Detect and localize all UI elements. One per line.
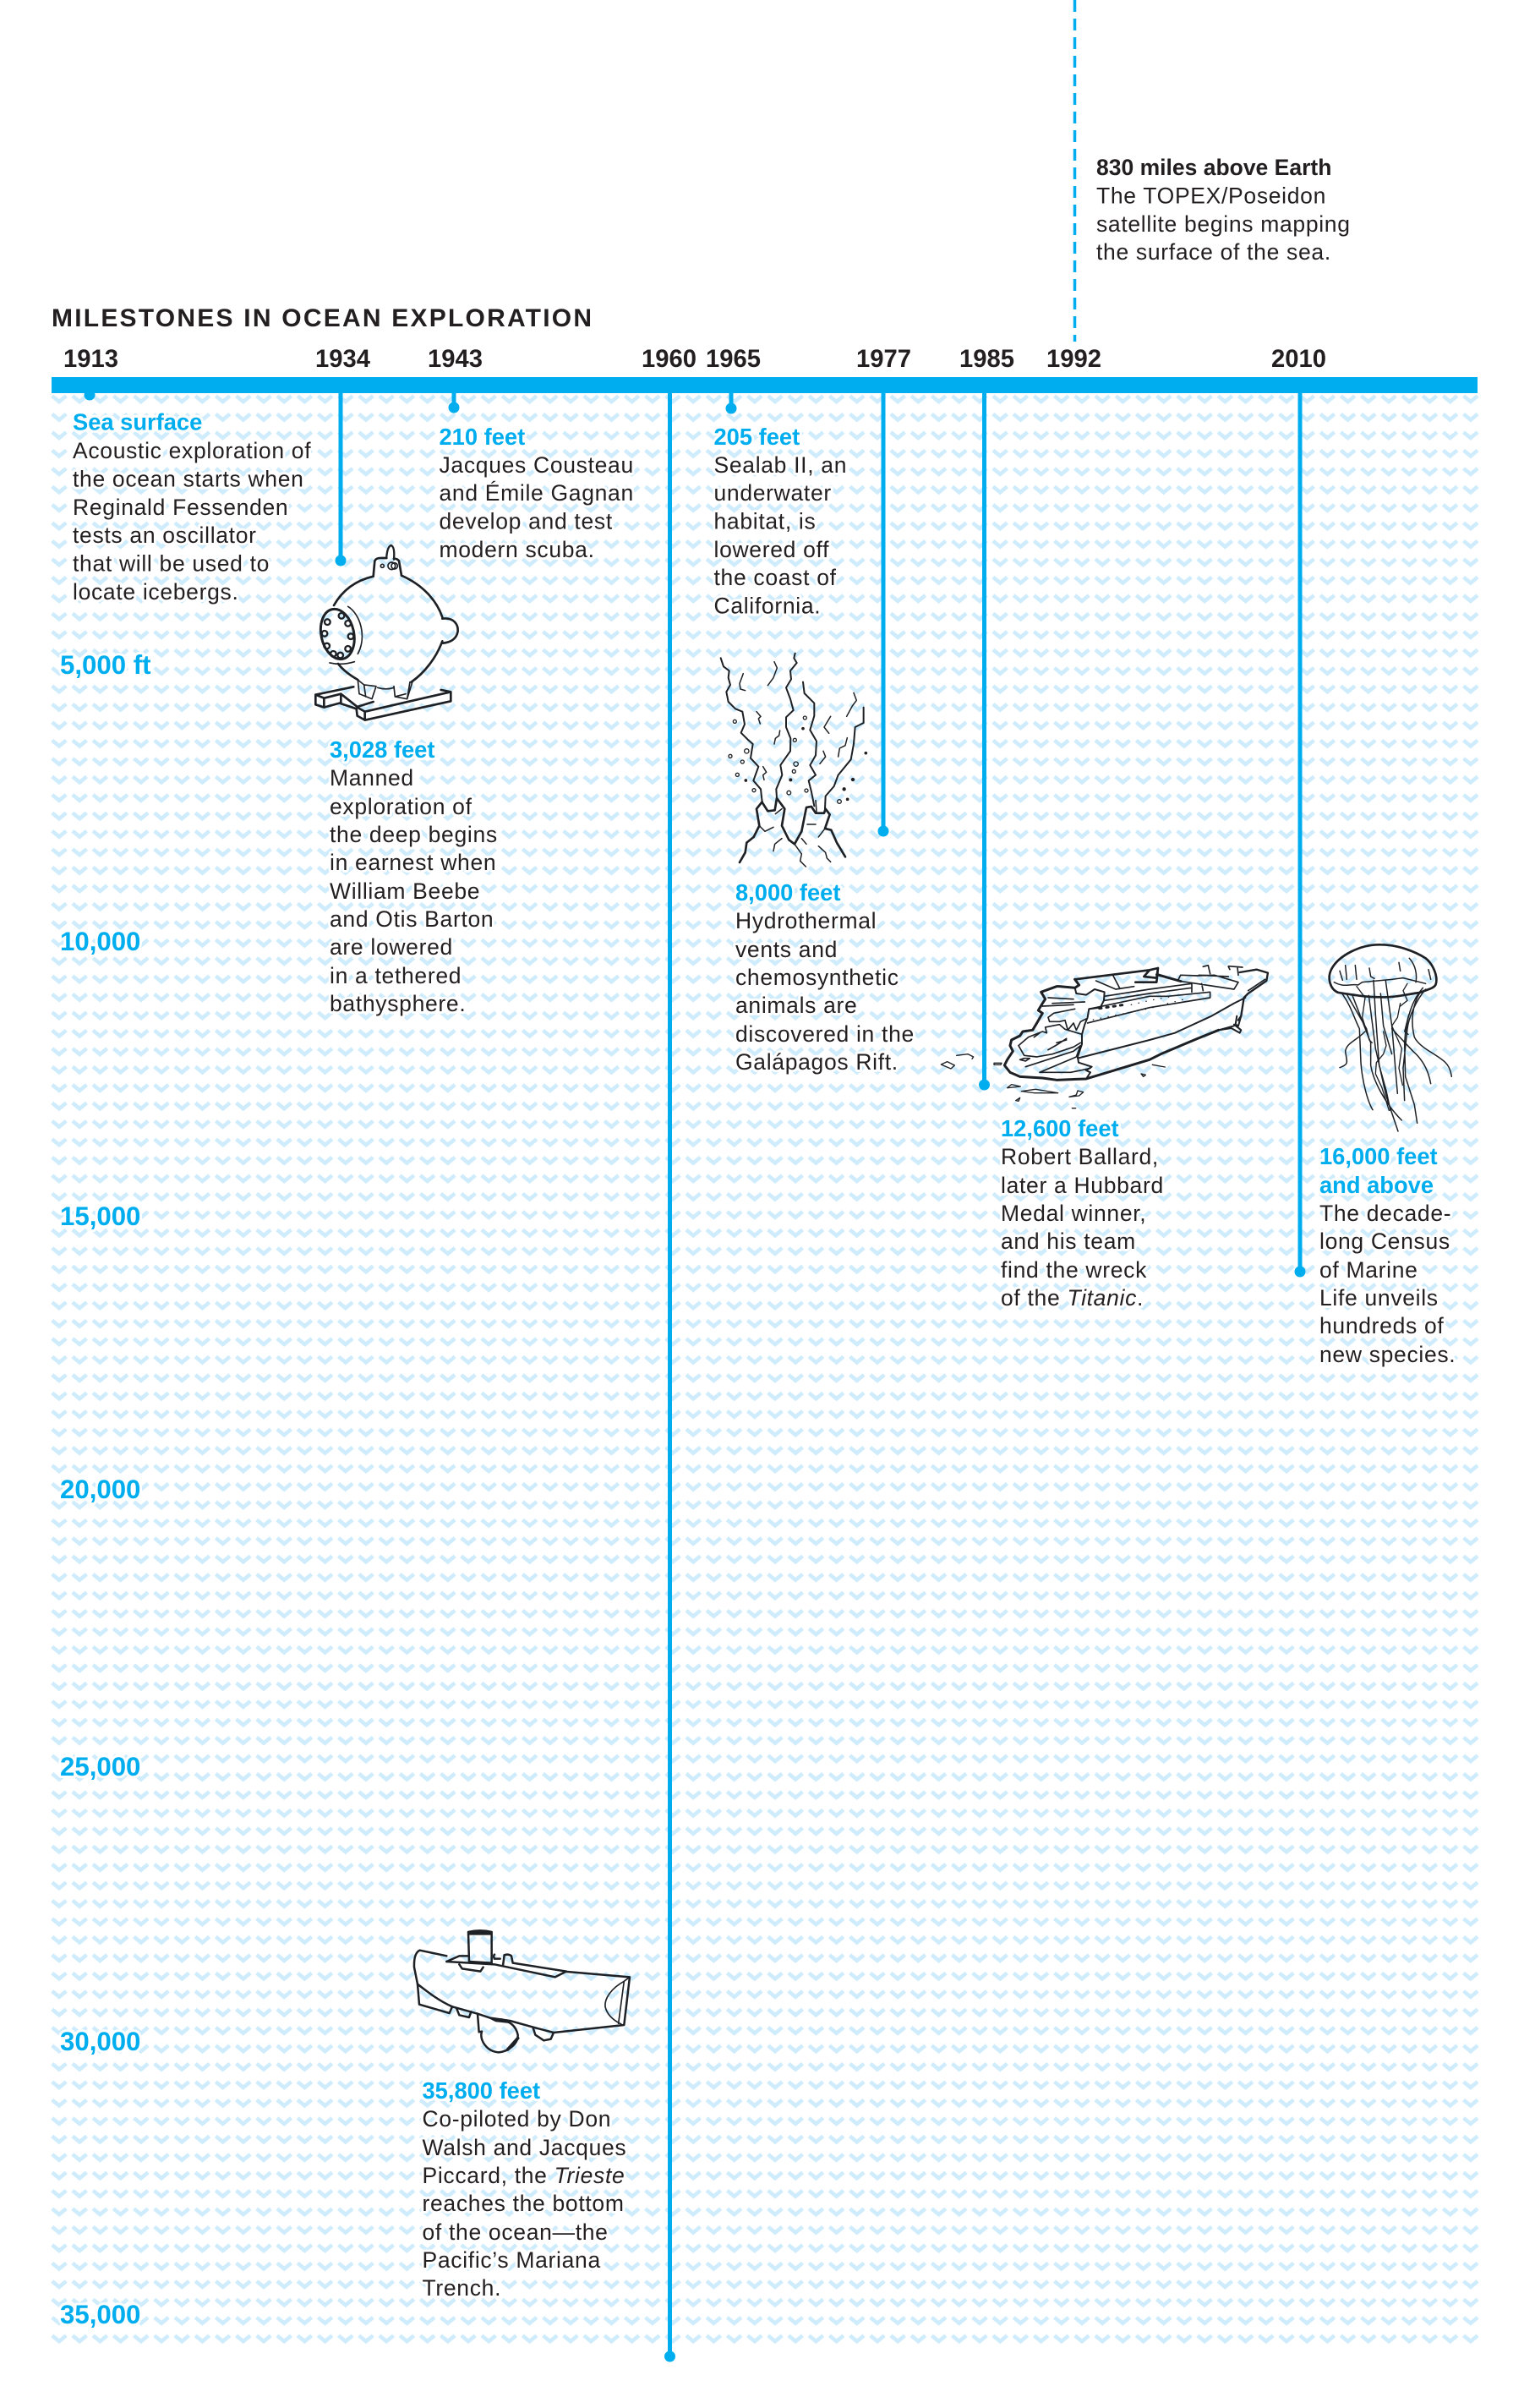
text: 1913 sea surface: that will be used to [73, 551, 270, 577]
text: 1992 satellite: satellite begins mapping [1096, 211, 1351, 237]
icon: Titanic wreck [941, 966, 1268, 1108]
text: 1985 Titanic: 12,600 feet [1001, 1115, 1119, 1141]
text: 1965 Sealab: underwater [713, 480, 832, 506]
text: 2010 Census of Marine Life: and above [1319, 1172, 1434, 1198]
depth axis labels: 35,000 [60, 2300, 140, 2329]
connector: 1985 [979, 393, 990, 1091]
text: 1985 Titanic: find the wreck [1001, 1257, 1147, 1283]
text: 2010 Census of Marine Life: 16,000 feet [1319, 1143, 1438, 1169]
year labels: 1913 [63, 346, 118, 373]
year labels: 1934 [315, 346, 371, 373]
text: 1965 Sealab: 205 feet [713, 424, 800, 450]
year labels: 1943 [428, 346, 483, 373]
icon: hydrothermal vents [721, 654, 867, 867]
text: 1913 sea surface [73, 409, 311, 605]
text: 1913 sea surface: the ocean starts when [73, 467, 304, 492]
text: 1965 Sealab: the coast of [713, 565, 837, 590]
text: 2010 Census of Marine Life: hundreds of [1319, 1313, 1444, 1338]
depth axis labels: 30,000 [60, 2027, 140, 2056]
text: 2010 Census of Marine Life: new species. [1319, 1342, 1456, 1367]
text: 1960 Trieste: of the ocean—the [423, 2219, 609, 2245]
text: 1985 Titanic: of the Titanic. [1001, 1285, 1144, 1311]
text: 2010 Census of Marine Life: of Marine [1319, 1257, 1418, 1283]
text: 1965 Sealab: Sealab II, an [713, 452, 847, 478]
text: 1977 vents: Hydrothermal [735, 908, 877, 933]
text: 1960 Trieste: Co-piloted by Don [423, 2106, 611, 2132]
connector: 1992 dashed satellite line [1073, 0, 1076, 342]
text: 1960 Trieste: Trench. [423, 2275, 501, 2301]
year labels: 1985 [959, 346, 1014, 373]
text: 1960 Trieste: Pacific’s Mariana [423, 2247, 601, 2273]
icon: Trieste bathyscaphe [414, 1930, 630, 2052]
text: 1943 scuba [440, 424, 634, 562]
text: 1913 sea surface: Sea surface [73, 409, 202, 435]
text: 2010 Census of Marine Life [1319, 1143, 1456, 1367]
text: 1985 Titanic [1001, 1115, 1164, 1311]
text: 1965 Sealab: lowered off [713, 537, 829, 562]
connector: 1965 [725, 393, 737, 414]
text: 1977 vents: discovered in the [735, 1021, 915, 1047]
text: 1913 sea surface: locate icebergs. [73, 579, 238, 605]
text: 1992 satellite: the surface of the sea. [1096, 239, 1331, 265]
text: 1943 scuba: and Émile Gagnan [440, 480, 634, 506]
connector: 1960 [664, 393, 675, 2362]
text: 1985 Titanic: later a Hubbard [1001, 1173, 1164, 1198]
text: 1985 Titanic: Robert Ballard, [1001, 1144, 1159, 1169]
connector: 1943 [448, 393, 460, 413]
depth axis labels: 10,000 [60, 927, 140, 956]
text: 1977 vents: Galápagos Rift. [735, 1049, 899, 1075]
depth axis labels: 25,000 [60, 1752, 140, 1781]
connector: 1934 [335, 393, 347, 566]
text: 1992 satellite [1096, 155, 1351, 265]
text: 1943 scuba: 210 feet [440, 424, 525, 450]
text: 1977 vents: vents and [735, 937, 838, 962]
text: 1992 satellite: The TOPEX/Poseidon [1096, 183, 1326, 208]
text: 2010 Census of Marine Life: Life unveils [1319, 1285, 1439, 1311]
text: 1977 vents: animals are [735, 993, 857, 1018]
title: MILESTONES IN OCEAN EXPLORATION [52, 304, 592, 332]
text: 1965 Sealab: habitat, is [713, 509, 816, 534]
text: 1934 bathysphere: and Otis Barton [330, 906, 494, 932]
text: 1985 Titanic: Medal winner, [1001, 1201, 1146, 1226]
text: 1934 bathysphere: exploration of [330, 794, 473, 819]
depth axis labels: 15,000 [60, 1201, 140, 1231]
text: 1965 Sealab: California. [713, 594, 821, 619]
text: 1992 satellite: 830 miles above Earth [1096, 155, 1331, 180]
year labels: 2010 [1271, 346, 1326, 373]
text: 1934 bathysphere: in a tethered [330, 963, 462, 988]
text: 1934 bathysphere: are lowered [330, 934, 453, 960]
text: 1977 vents: 8,000 feet [735, 879, 840, 906]
text: 1943 scuba: develop and test [440, 509, 613, 534]
text: 1960 Trieste [423, 2077, 626, 2301]
text: 1934 bathysphere: Manned [330, 765, 414, 791]
text: 1934 bathysphere [330, 736, 498, 1016]
text: 1934 bathysphere: in earnest when [330, 850, 496, 875]
year labels: 1965 [706, 346, 761, 373]
text: 1965 Sealab [713, 424, 847, 619]
text: 1934 bathysphere: bathysphere. [330, 991, 466, 1016]
text: 1960 Trieste: reaches the bottom [423, 2191, 625, 2216]
text: 1960 Trieste: 35,800 feet [423, 2077, 540, 2104]
depth axis labels [60, 650, 150, 2329]
year labels: 1992 [1046, 346, 1101, 373]
year labels: 1977 [856, 346, 911, 373]
connector: 1977 [877, 393, 889, 837]
year labels [63, 346, 1326, 373]
text: 1913 sea surface: tests an oscillator [73, 523, 257, 548]
icon: bathysphere [315, 545, 458, 720]
text: 1913 sea surface: Reginald Fessenden [73, 495, 288, 520]
text: 1913 sea surface: Acoustic exploration of [73, 438, 311, 463]
connector: 1913 [85, 389, 95, 401]
connector: 2010 [1295, 393, 1305, 1277]
text: 1977 vents [735, 879, 915, 1075]
timeline bar [52, 377, 1478, 393]
text: 1934 bathysphere: William Beebe [330, 878, 480, 904]
text: 2010 Census of Marine Life: The decade- [1319, 1201, 1451, 1226]
text: 1934 bathysphere: 3,028 feet [330, 736, 434, 763]
depth axis labels: 5,000 ft [60, 650, 150, 680]
text: 1960 Trieste: Piccard, the Trieste [423, 2163, 625, 2188]
text: 2010 Census of Marine Life: long Census [1319, 1229, 1450, 1254]
text: 1977 vents: chemosynthetic [735, 965, 899, 990]
year labels: 1960 [642, 346, 696, 373]
text: 1943 scuba: modern scuba. [440, 537, 595, 562]
text: 1934 bathysphere: the deep begins [330, 822, 498, 847]
depth axis labels: 20,000 [60, 1475, 140, 1504]
text: 1985 Titanic: and his team [1001, 1229, 1136, 1254]
text: 1943 scuba: Jacques Cousteau [440, 452, 634, 478]
text: 1960 Trieste: Walsh and Jacques [423, 2135, 626, 2160]
icon: jellyfish [1330, 944, 1451, 1131]
